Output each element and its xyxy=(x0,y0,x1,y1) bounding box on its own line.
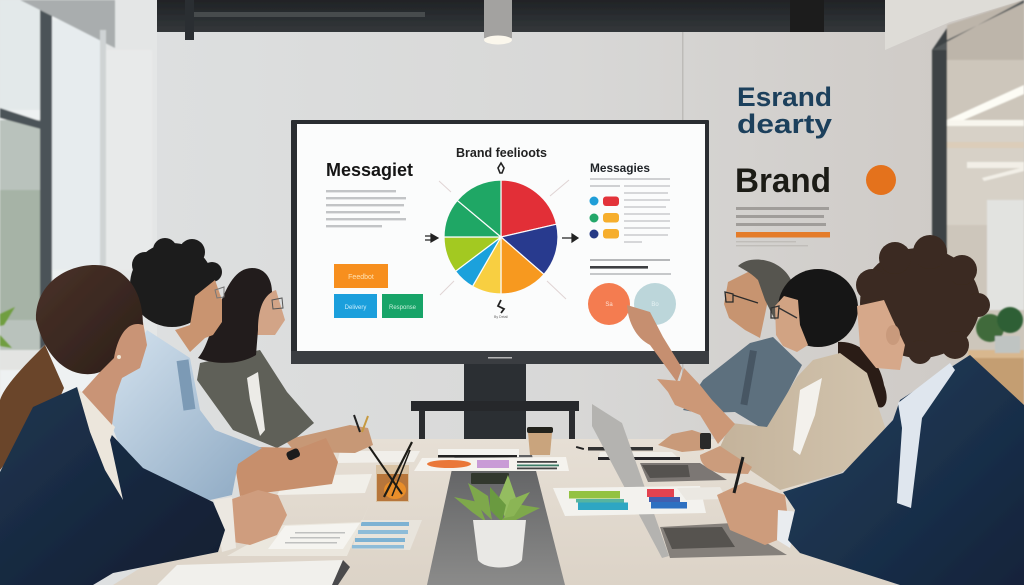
slide circle: pale blue xyxy=(634,283,676,325)
hands holding pen xyxy=(717,482,790,545)
face xyxy=(255,290,285,335)
slide button: blue xyxy=(334,294,377,318)
slide button: blue: Delivery xyxy=(345,305,366,311)
conference table xyxy=(113,439,895,585)
coffee cup xyxy=(527,427,553,455)
glass partition with reflected lights xyxy=(932,0,1024,360)
glasses arm xyxy=(215,287,224,298)
white inner top xyxy=(247,372,265,436)
curly hair xyxy=(856,235,990,364)
grey shirt xyxy=(683,337,802,432)
brown hair xyxy=(36,265,143,374)
paper front xyxy=(157,560,343,585)
head xyxy=(724,268,768,338)
face xyxy=(857,300,905,370)
person: man in grey shirt pointing at screen xyxy=(627,259,802,452)
slide small note xyxy=(590,259,671,275)
pencils xyxy=(354,415,360,432)
glasses xyxy=(771,306,797,318)
face and neck xyxy=(82,322,147,425)
wristband xyxy=(285,448,301,461)
blazer xyxy=(720,353,887,490)
person: woman in beige blazer xyxy=(657,269,887,490)
slide button: Feedback orange xyxy=(334,264,388,288)
wall graphic: brand poster text xyxy=(735,82,896,246)
poster heading: Esrand dearty: Esrand xyxy=(737,82,832,112)
grey hair xyxy=(738,259,792,320)
pen xyxy=(734,457,743,493)
cuff xyxy=(777,510,800,548)
poster heading: Esrand dearty xyxy=(737,82,832,139)
slide left heading: Messagiet: Messagiet xyxy=(326,160,413,180)
clasped hands xyxy=(215,490,287,545)
orange dot xyxy=(866,165,896,195)
notebook lower xyxy=(227,503,370,556)
forearm and hands xyxy=(235,438,338,496)
inner white shirt xyxy=(793,378,822,455)
poster heading: Esrand dearty: dearty xyxy=(737,109,832,139)
right side pens and paper xyxy=(576,446,680,460)
person: woman in olive jacket xyxy=(197,268,373,453)
soffit at right xyxy=(885,0,1024,50)
earring xyxy=(117,355,121,359)
stand and shelf under the display xyxy=(411,360,579,442)
plant in white pot xyxy=(454,475,540,568)
shirt and collar xyxy=(897,363,955,508)
pie chart xyxy=(444,180,558,294)
laptop base xyxy=(660,523,787,558)
raised arm xyxy=(627,305,682,382)
drinks glass with pens xyxy=(368,442,412,502)
arrow: left xyxy=(425,234,438,242)
table items: far side xyxy=(337,427,680,484)
white collar xyxy=(77,387,123,500)
chart diagonal tick marks xyxy=(439,180,569,299)
person: man in navy blazer, foreground right xyxy=(717,235,1024,585)
printed sheet with orange ellipse and bars xyxy=(414,457,569,471)
person: man in blue shirt xyxy=(102,238,338,500)
window on left wall xyxy=(0,0,152,400)
slide circle: orange xyxy=(588,283,630,325)
glasses xyxy=(272,298,283,309)
pendant lamp xyxy=(484,0,512,44)
far arm and hand xyxy=(285,425,373,453)
slide circle: pale blue: Bo xyxy=(651,302,659,308)
arrow: bottom xyxy=(498,300,504,313)
slide left body copy xyxy=(326,190,406,227)
table runner xyxy=(427,455,565,585)
slide button: Feedback orange: Feedbot xyxy=(348,274,374,281)
face xyxy=(775,296,808,352)
laptop lid xyxy=(592,404,669,558)
poster heading: Brand: Brand xyxy=(735,162,831,200)
ear xyxy=(886,325,900,345)
slide button: green xyxy=(382,294,423,318)
plant on windowsill xyxy=(0,307,15,348)
arrow: top xyxy=(498,163,504,173)
slide button: green: Response xyxy=(389,305,417,311)
phone on runner xyxy=(471,473,509,484)
slide right legend xyxy=(590,178,670,243)
navy jacket xyxy=(0,387,225,585)
display screen panel xyxy=(291,120,709,364)
slide right heading: Messagies: Messagies xyxy=(590,161,650,175)
tablet xyxy=(438,449,519,458)
ponytail xyxy=(838,342,887,408)
tiny chart caption: By Detail xyxy=(494,315,508,319)
olive jacket xyxy=(197,350,314,448)
slide heading: Brand feelioots: Brand feelioots xyxy=(456,145,547,160)
right shelf and potted plant xyxy=(968,307,1024,410)
poster small copy xyxy=(736,207,829,226)
lower hand xyxy=(700,446,752,474)
notebook far left xyxy=(337,451,420,463)
table items: near side xyxy=(157,442,727,585)
ponytail xyxy=(0,345,64,470)
blue stripe sheet xyxy=(352,520,422,550)
curly hair xyxy=(130,238,222,327)
laptop: front xyxy=(592,404,787,558)
person: woman in navy jacket, foreground left xyxy=(0,265,287,585)
ceiling band xyxy=(157,0,917,40)
black hair xyxy=(778,269,858,347)
glasses xyxy=(725,292,758,303)
face and neck xyxy=(175,280,222,352)
orange rule xyxy=(736,232,830,238)
pointing arm and hand xyxy=(657,368,735,444)
arrow: right xyxy=(562,234,578,242)
navy blazer xyxy=(783,355,1024,585)
dark hair xyxy=(198,268,272,363)
colour bar sheet xyxy=(553,486,727,516)
resting hand xyxy=(658,430,704,452)
laptop: rear xyxy=(640,463,727,482)
white cuff xyxy=(214,497,236,552)
slide circle: orange: Sa xyxy=(605,302,613,308)
notebook centre-left xyxy=(277,474,372,495)
blue shirt xyxy=(102,330,262,500)
